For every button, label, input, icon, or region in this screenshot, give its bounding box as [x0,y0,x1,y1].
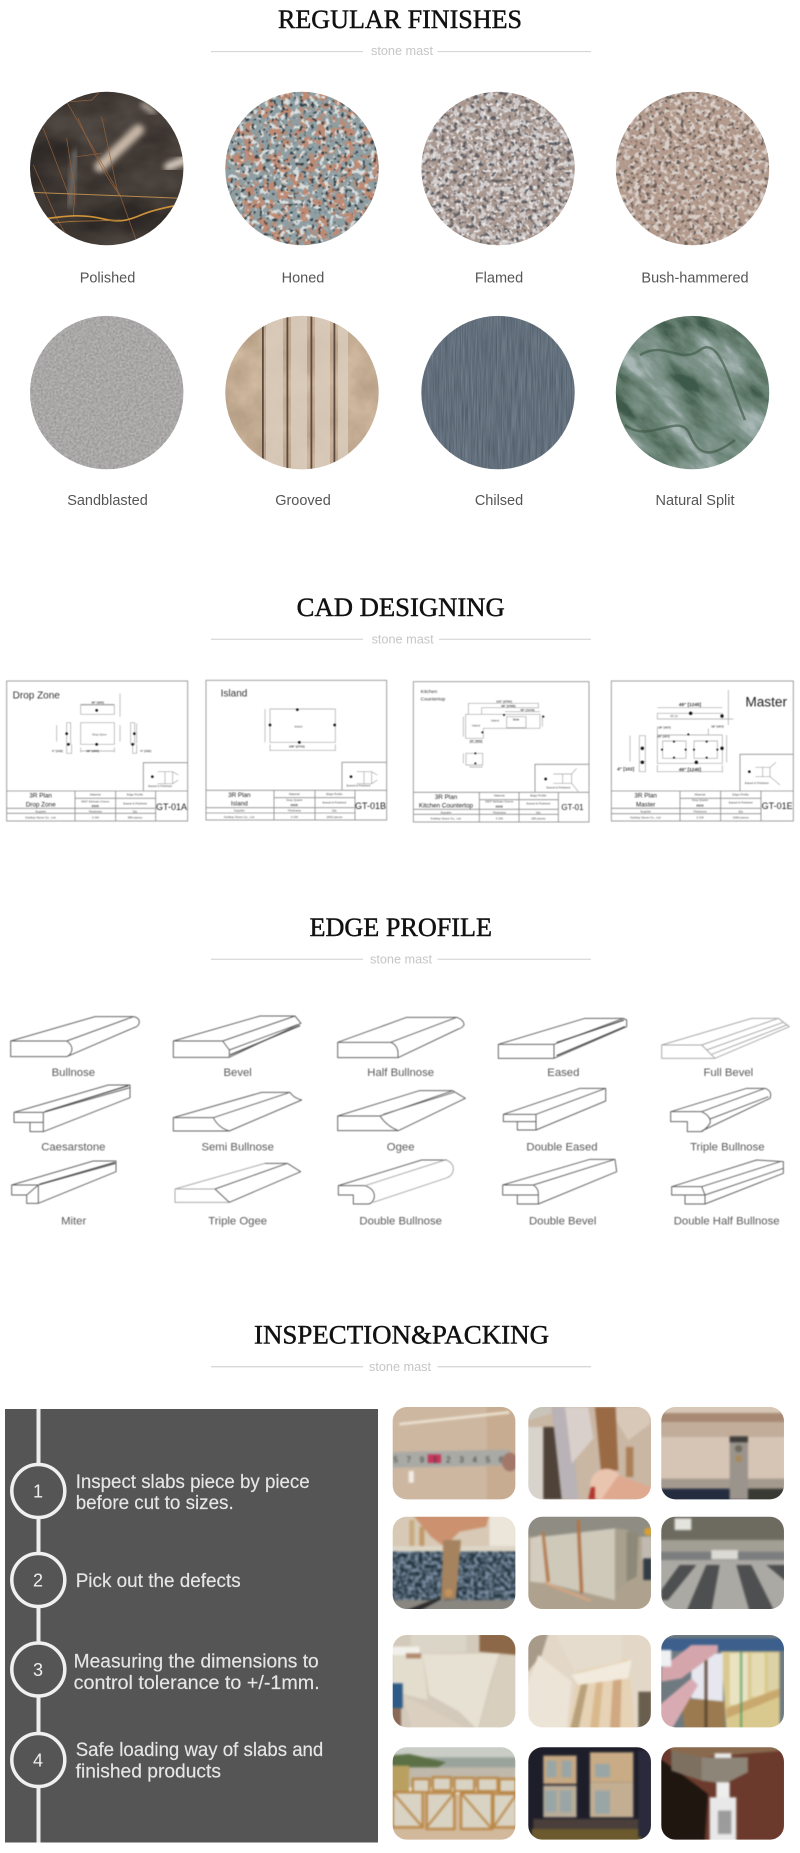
finish: grooved: Grooved [275,493,331,509]
CAD drawing: Kitchen Countertop GT-01: Material [494,794,505,798]
CAD drawing: Drop Zone GT-01A: GT-01A [156,802,187,812]
edge profile: Ogee [338,1091,465,1154]
CAD drawing: Drop Zone GT-01A: Edge Profile [127,793,143,797]
CAD drawing: Island GT-01B: Material [289,792,300,796]
CAD drawing: Master GT-01E: 18" [457] [657,735,670,739]
CAD drawing: Drop Zone GT-01A: 4" [102] [52,749,63,753]
CAD drawing: Island GT-01B: Edge Profile [326,792,343,796]
CAD drawing: Master GT-01E: Thickness [693,809,707,813]
CAD drawing: Master GT-01E [611,681,793,821]
edge profile: Double Eased [503,1088,606,1154]
step 2: pick out defects [12,1554,241,1606]
finish: polished: Polished [80,270,135,286]
photo: tape measure on slab edge [528,1407,651,1500]
step 1: inspect slabs [12,1464,310,1518]
edge profile: Triple Ogee [175,1163,301,1227]
edge profile: Semi Bullnose [173,1092,302,1154]
title: edge profile: EDGE PROFILE [310,913,492,942]
edge profile: Triple Bullnose: Triple Bullnose [690,1142,765,1154]
CAD drawing: Kitchen Countertop GT-01 [413,682,589,822]
step 1: inspect slabs: 1 [33,1482,43,1502]
CAD drawing: Master GT-01E: Edge Profile [733,793,749,797]
CAD drawing: Drop Zone GT-01A: 580 pieces [128,816,143,820]
CAD drawing: Island GT-01B: GT-01B [355,801,386,811]
photo: wooden crates outdoors [392,1747,516,1840]
subtitle divider: stone mast: stone mast [372,632,434,646]
CAD drawing: Island GT-01B: Supplier [234,809,245,813]
edge profile: Double Bullnose [338,1160,453,1227]
CAD drawing: Kitchen Countertop GT-01: Supplier [441,810,451,814]
CAD drawing: Kitchen Countertop GT-01: Island [472,724,480,728]
finish: chiseled [418,312,578,509]
section: regular finishes [30,10,770,508]
CAD drawing: Kitchen Countertop GT-01: 3 CM [496,817,503,821]
step 4: safe loading: 4 [33,1750,43,1770]
step 3: measuring dimensions: Measuring the dimensions to [74,1652,319,1673]
title: inspection and packing: INSPECTION&PACKING [254,1321,549,1350]
edge profile: Eased [498,1018,627,1079]
edge profile: Miter [12,1161,116,1227]
CAD drawing: Kitchen Countertop GT-01: GT-01 [561,803,584,812]
step 2: pick out defects: 2 [33,1570,43,1590]
CAD drawing: Master GT-01E: 4" [102] [617,766,635,771]
CAD drawing: Kitchen Countertop GT-01: 26" [660] [470,739,482,743]
CAD drawing: Island GT-01B [206,680,387,820]
CAD drawing: Drop Zone GT-01A [7,681,188,821]
CAD drawing: Island GT-01B: Qty [332,809,337,813]
edge profile: Semi Bullnose: Semi Bullnose [201,1142,274,1154]
CAD drawing: Master GT-01E: Master [636,801,655,808]
edge profile: Caesarstone: Caesarstone [41,1142,105,1154]
CAD drawing: Drop Zone GT-01A: Qty [133,809,138,813]
photo: covering slabs with cloth [392,1635,516,1728]
CAD drawing: Island GT-01B: 108" [2743] [289,745,305,749]
CAD drawing: Island GT-01B: 3 CM [291,815,298,819]
panel: inspection steps [5,1409,378,1842]
title: CAD designing: CAD DESIGNING [297,593,505,622]
CAD drawing: Master GT-01E: BB/B [696,803,704,807]
edge profile: Triple Bullnose [671,1088,771,1154]
CAD drawing: Master GT-01E: Gray Quartz [692,798,709,802]
CAD drawing: Drop Zone GT-01A: 5007 Delicato Creme [81,799,110,803]
edge profile: Double Eased: Double Eased [526,1142,598,1154]
CAD drawing: Master GT-01E: Eased & Polished [745,781,769,785]
finish: flamed [418,88,578,286]
CAD drawing: Kitchen Countertop GT-01: Kitchen Countertop [419,803,474,810]
edge profile: Full Bevel: Full Bevel [703,1067,753,1079]
edge profile: Double Bullnose: Double Bullnose [359,1215,442,1227]
finish: bush-hammered [612,88,772,286]
CAD drawing: Drop Zone GT-01A: Thickness [89,809,103,813]
photo: tape on blue granite edge [392,1516,516,1609]
CAD drawing: Kitchen Countertop GT-01: 3R Plan [435,794,458,801]
step 2: pick out defects: Pick out the defects [76,1571,241,1592]
CAD drawing: Island GT-01B: Goldtop Stone Co., Ltd. [224,815,255,819]
CAD drawing: Kitchen Countertop GT-01: Eased & Polished [547,786,570,790]
edge profile: Miter: Miter [61,1215,86,1227]
CAD drawing: Island GT-01B: 3R Plan [228,792,251,799]
finish: honed: Honed [282,270,324,286]
CAD drawing: Drop Zone GT-01A: Supplier [35,809,46,813]
CAD drawing: Master GT-01E: 49" [1245] [679,702,702,707]
CAD drawing: Master GT-01E: Supplier [640,809,651,813]
CAD drawing: Island GT-01B: Island [294,725,303,729]
photo: wrapped packing with wooden slats [528,1635,651,1728]
subtitle divider: stone mast: stone mast [369,1360,431,1374]
edge profile: Double Bevel: Double Bevel [529,1215,596,1227]
photo: slabs laid out on factory floor [661,1516,784,1609]
step 3: measuring dimensions [12,1643,320,1696]
photo: tape measure on beige slab: 5 7 9 1 2 3 4 5 6 [393,1455,504,1464]
step 4: safe loading: Safe loading way of slabs and [76,1740,323,1761]
finish: sandblasted [27,312,187,509]
step 1: inspect slabs: Inspect slabs piece by piece [76,1472,310,1493]
finish: chiseled: Chilsed [475,493,523,509]
subtitle divider: stone mast: stone mast [370,952,432,966]
CAD drawing: Drop Zone GT-01A: Eased & Polished [148,784,172,788]
photo: fumigation of wooden crate [661,1635,784,1728]
CAD drawing: Kitchen Countertop GT-01: 48" [1219] [520,708,534,712]
CAD drawing: Drop Zone GT-01A: Material [90,793,101,797]
CAD drawing: Drop Zone GT-01A: 3 CM [92,816,99,820]
CAD drawing: Master GT-01E: Material [695,793,706,797]
step 3: measuring dimensions: 3 [33,1660,43,1680]
CAD drawing: Drop Zone GT-01A: 38" [965] [91,700,104,704]
CAD drawing: Drop Zone GT-01A: Eased & Polished [123,801,147,805]
CAD drawing: Kitchen Countertop GT-01: Countertop [421,696,446,702]
CAD drawing: Kitchen Countertop GT-01: Thickness [493,810,507,814]
CAD drawing: Master GT-01E: Master [745,695,788,710]
step 4: safe loading [12,1734,323,1786]
edge profile: Double Bevel [503,1159,617,1227]
CAD drawing: Island GT-01B: Island [231,801,248,808]
edge profile: Eased: Eased [547,1067,579,1079]
CAD drawing: Kitchen Countertop GT-01: 5007 Delicato Creme [485,799,514,803]
CAD drawing: Drop Zone GT-01A: 4" [102] [140,749,151,753]
CAD drawing: Drop Zone GT-01A: Drop Zone [26,801,56,808]
step 1: inspect slabs: before cut to sizes. [76,1493,234,1514]
CAD drawing: Kitchen Countertop GT-01: BB/B [496,804,504,808]
edge profile: Bevel [173,1016,301,1079]
CAD drawing: Island GT-01B: BB/B [291,803,299,807]
CAD drawing: Drop Zone GT-01A: Goldtop Stone Co., Ltd. [25,816,56,820]
edge profile: Caesarstone [14,1085,130,1154]
CAD drawing: Kitchen Countertop GT-01: Island [491,719,499,723]
photo: wrapped slabs in warehouse [528,1516,651,1609]
CAD drawing: Island GT-01B: Gray Quartz [286,798,303,802]
CAD drawing: Drop Zone GT-01A: Drop Zone [13,690,60,701]
photo: tape measure on beige slab [392,1407,516,1500]
CAD drawing: Master GT-01E: Qty [738,809,743,813]
section: edge profile [11,913,789,1227]
CAD drawing: Kitchen Countertop GT-01: Eased & Polished [527,801,550,805]
CAD drawing: Kitchen Countertop GT-01: Qty [536,810,541,814]
finish: polished [28,90,186,286]
CAD drawing: Master GT-01E: 3R Plan [634,793,657,800]
edge profile: Triple Ogee: Triple Ogee [208,1215,267,1227]
finish: natural split: Natural Split [656,493,734,509]
title: regular finishes: REGULAR FINISHES [278,5,522,34]
CAD drawing: Kitchen Countertop GT-01: 180 pieces [531,817,546,821]
CAD drawing: Island GT-01B: Eased & Polished [347,783,370,787]
edge profile: Double Half Bullnose: Double Half Bullnose [674,1215,780,1227]
finish: sandblasted: Sandblasted [67,493,148,509]
CAD drawing: Kitchen Countertop GT-01: 110" [2794] [496,700,512,704]
CAD drawing: Drop Zone GT-01A: BB/B [92,804,100,808]
CAD drawing: Kitchen Countertop GT-01: Edge Profile [530,794,547,798]
finish: honed [222,88,382,286]
CAD drawing: Master GT-01E: 3 CM [696,816,704,820]
step 4: safe loading: finished products [76,1762,221,1783]
section: CAD designing [7,593,793,822]
edge profile: Bullnose [11,1017,139,1079]
CAD drawing: Kitchen Countertop GT-01: Sink [513,717,519,721]
edge profile: Double Half Bullnose [672,1160,783,1227]
CAD drawing: Kitchen Countertop GT-01: Kitchen [421,689,438,695]
CAD drawing: Island GT-01B: Island [221,688,247,699]
edge profile: Half Bullnose [338,1017,464,1079]
edge profile: Bullnose: Bullnose [52,1067,95,1079]
edge profile: Half Bullnose: Half Bullnose [367,1067,434,1079]
edge profile: Full Bevel [662,1018,789,1079]
CAD drawing: Kitchen Countertop GT-01: 98" [2489] [501,704,515,708]
CAD drawing: Master GT-01E: GT-01E [762,801,793,811]
CAD drawing: Drop Zone GT-01A: 38" [965] [86,749,99,753]
CAD drawing: Master GT-01E: 18" [457] [658,725,671,729]
finish: bush-hammered: Bush-hammered [641,270,749,286]
edge profile: Ogee: Ogee [387,1142,415,1154]
step 3: measuring dimensions: control tolerance to +/-1mm. [74,1673,320,1694]
CAD drawing: Drop Zone GT-01A: Drop Zone [92,733,107,737]
finish: natural split [616,316,770,508]
CAD drawing: Master GT-01E: 49" [1245] [679,767,702,772]
finish: flamed: Flamed [475,270,523,286]
photo: tape against slab thickness [661,1407,784,1500]
CAD drawing: Master GT-01E: 1000 pieces [733,816,749,820]
section: inspection and packing [5,1321,788,1844]
edge profile: Bevel: Bevel [223,1067,252,1079]
CAD drawing: Island GT-01B: 1000 pieces [326,815,343,819]
CAD drawing: Kitchen Countertop GT-01: Goldtop Stone Co., Ltd. [430,817,462,821]
CAD drawing: Master GT-01E: Eased & Polished [729,801,753,805]
CAD drawing: Master GT-01E: 93 12 [670,714,678,718]
CAD drawing: Master GT-01E: 18" [457] [711,725,724,729]
subtitle divider: stone mast: stone mast [371,44,433,58]
CAD drawing: Master GT-01E: Goldtop Stone Co., Ltd. [630,816,661,820]
CAD drawing: Island GT-01B: Eased & Polished [323,800,346,804]
finish: grooved [222,312,382,509]
photo: crates loaded in container [528,1747,651,1840]
CAD drawing: Drop Zone GT-01A: 3R Plan [29,793,52,800]
CAD drawing: Island GT-01B: Thickness [288,809,302,813]
photo: container seal [661,1747,784,1840]
